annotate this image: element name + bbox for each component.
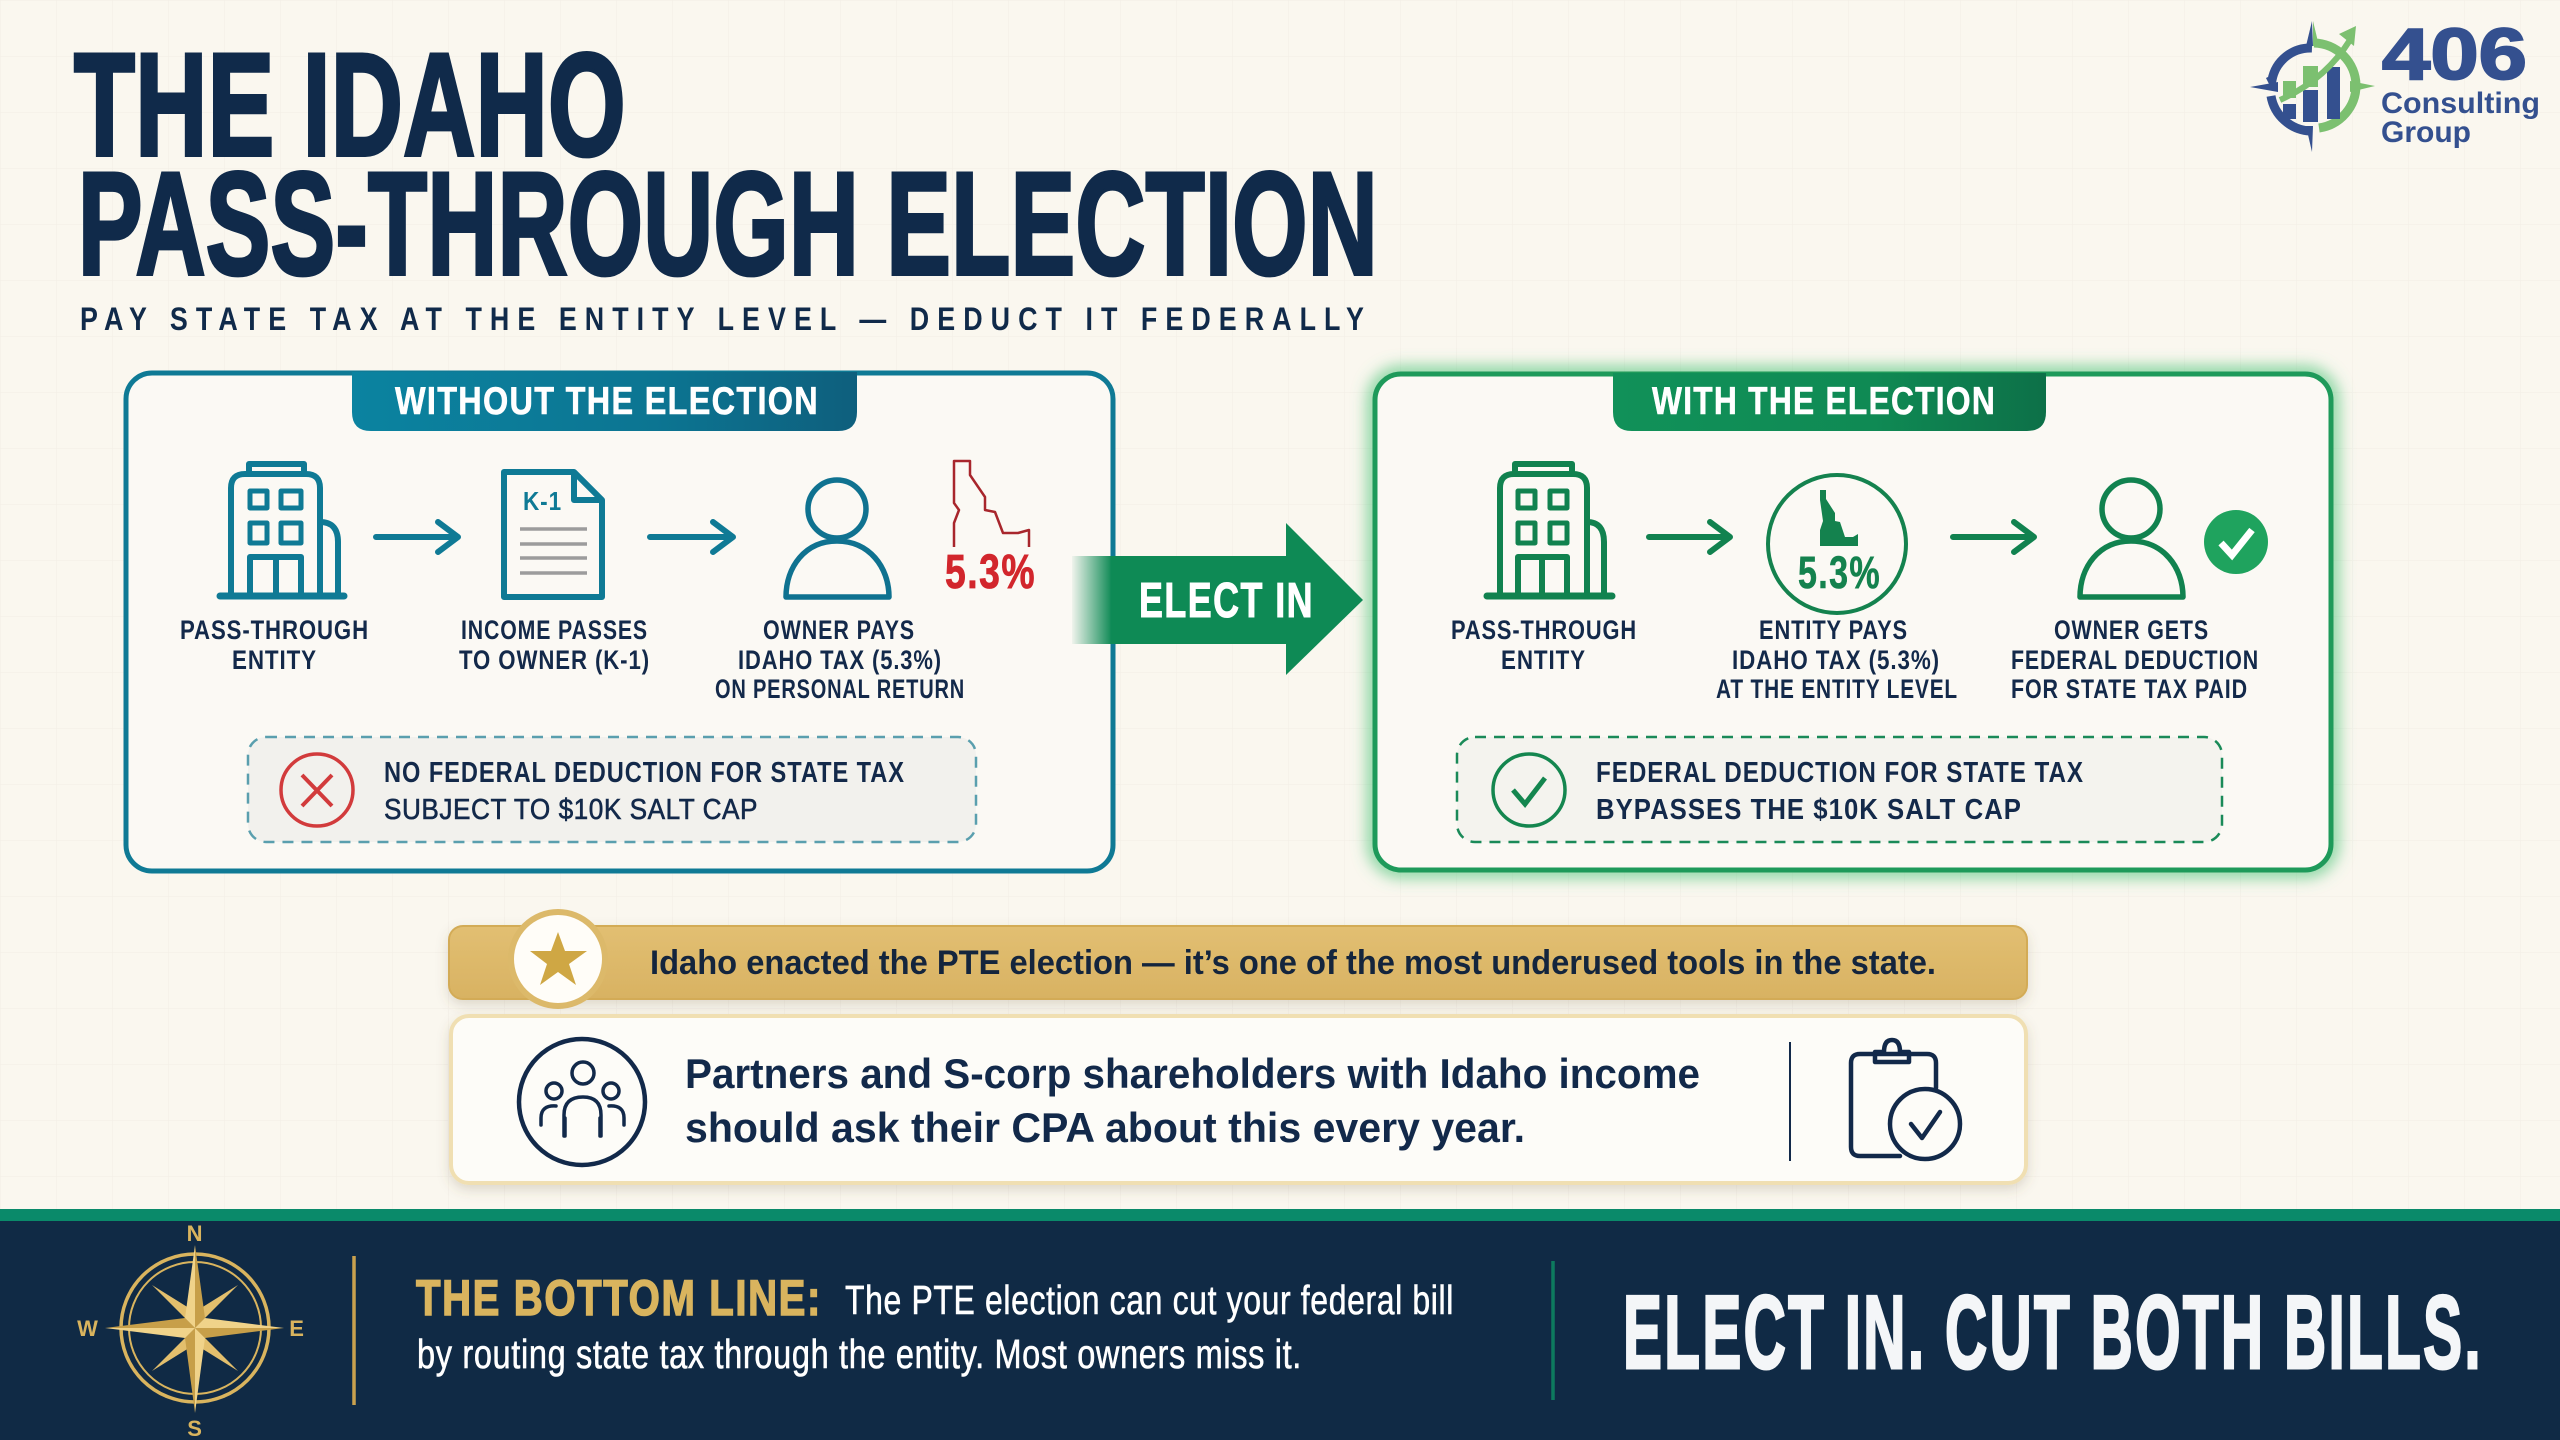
arrow [1953, 522, 2034, 552]
banner text: Idaho enacted the PTE election — it’s one of the most underused tools in the state. [650, 944, 1936, 982]
callout text [1596, 757, 2084, 826]
bottom line text: THE BOTTOM LINE: [416, 1270, 822, 1326]
icon: compass rose [77, 1221, 305, 1440]
label: income passes: INCOME PASSES [461, 615, 648, 645]
panel: without the election [126, 372, 1113, 871]
label: pass-through entity [1451, 615, 1637, 675]
icon: green check badge [2204, 510, 2268, 574]
label: owner pays [715, 615, 965, 704]
icon: K-1 document [504, 472, 602, 597]
body text: Partners and S-corp shareholders with Idaho income [685, 1050, 1700, 1097]
label: pass-through entity [180, 615, 369, 675]
logo text: Consulting [2381, 87, 2540, 120]
callout text: FEDERAL DEDUCTION FOR STATE TAX [1596, 757, 2084, 789]
icon: building [1487, 464, 1612, 596]
label: owner gets [2011, 615, 2259, 704]
body text: should ask their CPA about this every year. [685, 1104, 1525, 1151]
icon: star badge [511, 912, 605, 1006]
icon: red X [281, 754, 353, 826]
label: income passes [459, 615, 650, 675]
label: pass-through entity: PASS-THROUGH [180, 615, 369, 645]
icon: Idaho outline [954, 461, 1029, 547]
arrow: elect in [1072, 523, 1363, 675]
callout text: SUBJECT TO $10K SALT CAP [384, 794, 758, 826]
label: entity pays: AT THE ENTITY LEVEL [1716, 674, 1958, 704]
icon: Idaho 5.3% badge: 5.3% [1798, 547, 1881, 598]
logo text: Group [2381, 116, 2471, 149]
title: THE IDAHO [74, 23, 626, 186]
logo text [2381, 15, 2540, 149]
logo: 406 Consulting Group [2250, 15, 2540, 152]
label: owner gets: OWNER GETS [2054, 615, 2209, 645]
label: pass-through entity: ENTITY [1501, 645, 1586, 675]
label: owner gets: FOR STATE TAX PAID [2011, 674, 2248, 704]
label: owner pays: IDAHO TAX (5.3%) [738, 645, 942, 675]
icon: compass rose: W [77, 1316, 99, 1341]
label: income passes: TO OWNER (K-1) [459, 645, 650, 675]
arrow [650, 522, 733, 552]
footer band [0, 1209, 2560, 1440]
callout text [384, 757, 905, 826]
callout text: BYPASSES THE $10K SALT CAP [1596, 794, 2022, 826]
label: entity pays: IDAHO TAX (5.3%) [1732, 645, 1940, 675]
body text [685, 1050, 1700, 1151]
bottom line text: The PTE election can cut your federal bill [845, 1277, 1454, 1323]
label: owner pays: ON PERSONAL RETURN [715, 674, 965, 704]
banner: gold callout [449, 912, 2027, 1006]
logo text: 406 [2382, 15, 2527, 95]
panel heading tab [352, 372, 857, 431]
panel heading tab: WITHOUT THE ELECTION [395, 380, 819, 423]
label: owner gets: FEDERAL DEDUCTION [2011, 645, 2259, 675]
bottom line text [416, 1270, 1454, 1377]
icon: green check circle [1493, 754, 1565, 826]
panel heading tab [1613, 373, 2046, 431]
label: owner pays: OWNER PAYS [763, 615, 915, 645]
panel: with the election [1375, 373, 2331, 870]
icon: K-1 document: K-1 [523, 486, 562, 516]
icon: building [220, 464, 344, 596]
panel heading tab: WITH THE ELECTION [1652, 380, 1996, 423]
bottom line text: by routing state tax through the entity. Most owners miss it. [417, 1331, 1302, 1377]
callout: federal deduction [1457, 737, 2222, 842]
icon: people group [519, 1039, 645, 1165]
icon: person [2080, 480, 2183, 597]
title: PASS-THROUGH ELECTION [78, 142, 1378, 305]
subtitle: PAY STATE TAX AT THE ENTITY LEVEL — DEDUCT IT FEDERALLY [80, 301, 1372, 337]
callout: no federal deduction [248, 737, 976, 842]
label: entity pays [1716, 615, 1958, 704]
title [74, 23, 1378, 305]
panel: partners and S-corp shareholders [451, 1016, 2026, 1183]
arrow: elect in: ELECT IN [1139, 574, 1314, 628]
label: pass-through entity: PASS-THROUGH [1451, 615, 1637, 645]
icon: Idaho 5.3% badge [1768, 475, 1906, 613]
icon: clipboard check [1851, 1040, 1960, 1159]
icon: compass rose: N [187, 1221, 203, 1246]
icon: compass rose: E [289, 1316, 305, 1341]
label: pass-through entity: ENTITY [232, 645, 317, 675]
label: entity pays: ENTITY PAYS [1759, 615, 1908, 645]
callout text: NO FEDERAL DEDUCTION FOR STATE TAX [384, 757, 905, 789]
arrow [1649, 522, 1730, 552]
icon: compass and growth chart [2250, 21, 2375, 152]
icon: person [786, 480, 889, 597]
arrow [376, 522, 458, 552]
5.3% red: 5.3% [945, 546, 1036, 599]
